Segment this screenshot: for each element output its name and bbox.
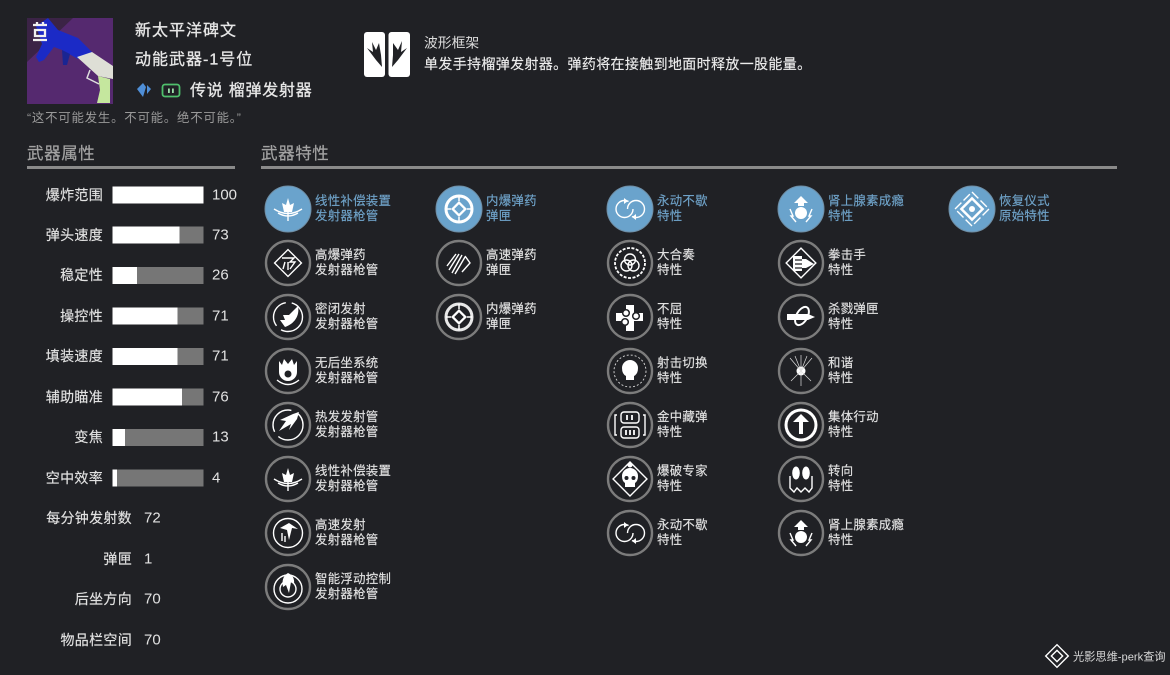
heading: weapon stats [27,144,235,169]
perk: golden hidden rounds: 金中藏弹 [657,409,708,424]
stat: aim assist: 辅助瞄准 [46,389,103,405]
perk: quick launch [266,511,378,555]
stat: magazine [103,550,152,568]
perk: unrelenting [608,295,682,339]
perk: ensemble [608,241,695,285]
stat: reload: 71 [212,348,229,364]
perk: harmony [779,349,853,393]
stat: aim assist [46,388,229,406]
stat: handling: 操控性 [60,308,103,324]
stat: velocity: 73 [212,226,229,244]
perk: implosion rounds selected [436,186,537,232]
perk: turnabout: 转向 [828,463,853,478]
stat: zoom: 13 [212,428,229,446]
perk: swashbuckler: 特性 [828,262,853,277]
stat: airborne effectiveness [46,470,220,486]
perk: high velocity rounds: 弹匣 [486,263,511,277]
stat: stability: 26 [212,266,229,284]
perk: slaughter magazine [779,295,879,339]
panel: stats bars [46,186,237,648]
perk: quick launch: 发射器枪管 [315,532,378,547]
stat: recoil direction: 后坐方向 [75,591,132,607]
stat: blast radius: 100 [212,186,237,204]
perk: perpetual motion [608,511,708,555]
stat: stability [60,266,229,284]
perk: high explosive [266,241,378,285]
icon: kinetic damage [137,83,151,97]
perk: slaughter magazine: 杀戮弹匣 [828,301,879,316]
perk: golden hidden rounds: 特性 [657,424,682,439]
perk: implosion rounds selected: 弹匣 [486,209,511,223]
stat: zoom [74,428,229,446]
perk: harmony: 特性 [828,370,853,385]
panel: traits column two [778,186,904,555]
stat: zoom: 变焦 [74,429,103,445]
perk: smart drift control: 智能浮动控制 [315,571,391,586]
weapon rarity and type: 传说 榴弹发射器 [190,82,312,100]
perk: perpetual motion selected: 永动不歇 [657,194,708,208]
perk: hot launch tube [266,403,378,447]
perk: linear compensator [266,457,391,501]
perk: implosion rounds: 内爆弹药 [486,302,537,316]
perk: hot launch tube: 发射器枪管 [315,424,378,439]
stat: reload [46,348,229,365]
perk: demolitionist: 爆破专家 [657,463,708,478]
flavor quote: “这不可能发生。不可能。绝不可能。” [27,110,242,125]
perk: sealed launch: 发射器枪管 [315,316,378,331]
stat: blast radius: 爆炸范围 [46,187,103,203]
perk: collective action [779,403,879,447]
panel: traits column one [607,186,708,555]
frame name: 波形框架 [424,36,479,50]
stat: handling [60,308,229,324]
perk: restorative ritual selected: 恢复仪式 [999,194,1050,208]
heading: weapon perks [261,144,1117,169]
perk: implosion rounds [437,295,537,339]
panel: barrels column [265,186,391,609]
stat: airborne effectiveness: 空中效率 [46,470,103,486]
perk: restorative ritual selected [949,186,1050,232]
perk: perpetual motion selected [607,186,708,232]
stat: rounds per minute: 每分钟发射数 [46,510,132,526]
perk: recoilless system: 发射器枪管 [315,370,378,385]
weapon thumbnail [27,18,113,104]
perk: ensemble: 大合奏 [657,247,695,262]
perk: unrelenting: 特性 [657,316,682,331]
stat: stability: 稳定性 [60,267,103,283]
panel: magazines column [436,186,537,339]
perk: demolitionist [608,457,708,501]
perk: smart drift control [266,565,391,609]
perk: collective action: 集体行动 [828,409,879,424]
perk: turnabout [779,457,853,501]
stat: blast radius [46,186,237,204]
panel: origin trait [949,186,1050,232]
perk: swashbuckler [779,241,866,285]
watermark: 光影思维-perk查询 [1073,650,1166,664]
perk: fire mode switch: 特性 [657,370,682,385]
stat: recoil direction [75,590,161,608]
perk: slaughter magazine: 特性 [828,316,853,331]
perk: linear compensator selected: 发射器枪管 [315,208,378,223]
perk: high explosive: 高爆弹药 [315,247,366,262]
perk: implosion rounds: 弹匣 [486,317,511,331]
perk: high explosive: 发射器枪管 [315,262,378,277]
heading: weapon stats: 武器属性 [27,144,95,163]
perk: adrenaline junkie: 肾上腺素成瘾 [828,517,904,532]
stat: reload: 填装速度 [46,348,103,364]
perk: quick launch: 高速发射 [315,517,366,532]
stat: handling: 71 [212,308,229,324]
perk: fire mode switch: 射击切换 [657,355,708,370]
perk: ensemble: 特性 [657,262,682,277]
weapon title: 新太平洋碑文 [135,22,237,40]
perk: adrenaline junkie [779,511,904,555]
perk: hot launch tube: 热发发射管 [315,409,378,424]
perk: harmony: 和谐 [828,356,853,370]
watermark [1046,645,1166,667]
perk: demolitionist: 特性 [657,478,682,493]
perk: implosion rounds selected: 内爆弹药 [486,194,537,208]
perk: linear compensator selected [265,186,391,232]
icon: wave frame [364,32,410,77]
perk: adrenaline junkie selected [778,186,904,232]
perk: high velocity rounds: 高速弹药 [486,247,537,262]
heading: weapon perks: 武器特性 [261,144,329,163]
perk: recoilless system [266,349,378,393]
stat: aim assist: 76 [212,388,229,406]
perk: restorative ritual selected: 原始特性 [999,208,1050,223]
perk: fire mode switch [608,349,708,393]
stat: rounds per minute: 72 [144,510,161,526]
perk: golden hidden rounds [608,403,708,447]
perk: sealed launch [266,295,378,339]
perk: linear compensator: 线性补偿装置 [315,463,391,478]
perk: perpetual motion selected: 特性 [657,208,682,223]
perk: adrenaline junkie selected: 特性 [828,208,853,223]
perk: linear compensator: 发射器枪管 [315,478,378,493]
perk: adrenaline junkie selected: 肾上腺素成瘾 [828,193,904,208]
perk: collective action: 特性 [828,424,853,439]
stat: inventory size: 物品栏空间 [60,632,132,648]
perk: sealed launch: 密闭发射 [315,301,366,316]
frame description: 单发手持榴弹发射器。弹药将在接触到地面时释放一股能量。 [424,56,811,72]
stat: recoil direction: 70 [144,590,161,608]
stat: inventory size [60,632,161,648]
perk: adrenaline junkie: 特性 [828,532,853,547]
perk: linear compensator selected: 线性补偿装置 [315,193,391,208]
perk: perpetual motion: 特性 [657,532,682,547]
perk: smart drift control: 发射器枪管 [315,586,378,601]
stat: magazine: 1 [144,550,152,568]
stat: velocity: 弹头速度 [46,227,103,243]
stat: velocity [46,226,229,244]
weapon slot: 动能武器-1号位 [135,50,253,68]
perk: swashbuckler: 拳击手 [828,247,866,262]
stat: magazine: 弹匣 [103,551,132,567]
perk: turnabout: 特性 [828,478,853,493]
perk: recoilless system: 无后坐系统 [315,356,378,370]
stat: airborne effectiveness: 4 [212,470,220,486]
icon: green ammo badge [162,84,180,96]
perk: unrelenting: 不屈 [657,302,682,316]
perk: high velocity rounds [437,241,537,285]
stat: inventory size: 70 [144,632,161,648]
perk: perpetual motion: 永动不歇 [657,518,708,532]
